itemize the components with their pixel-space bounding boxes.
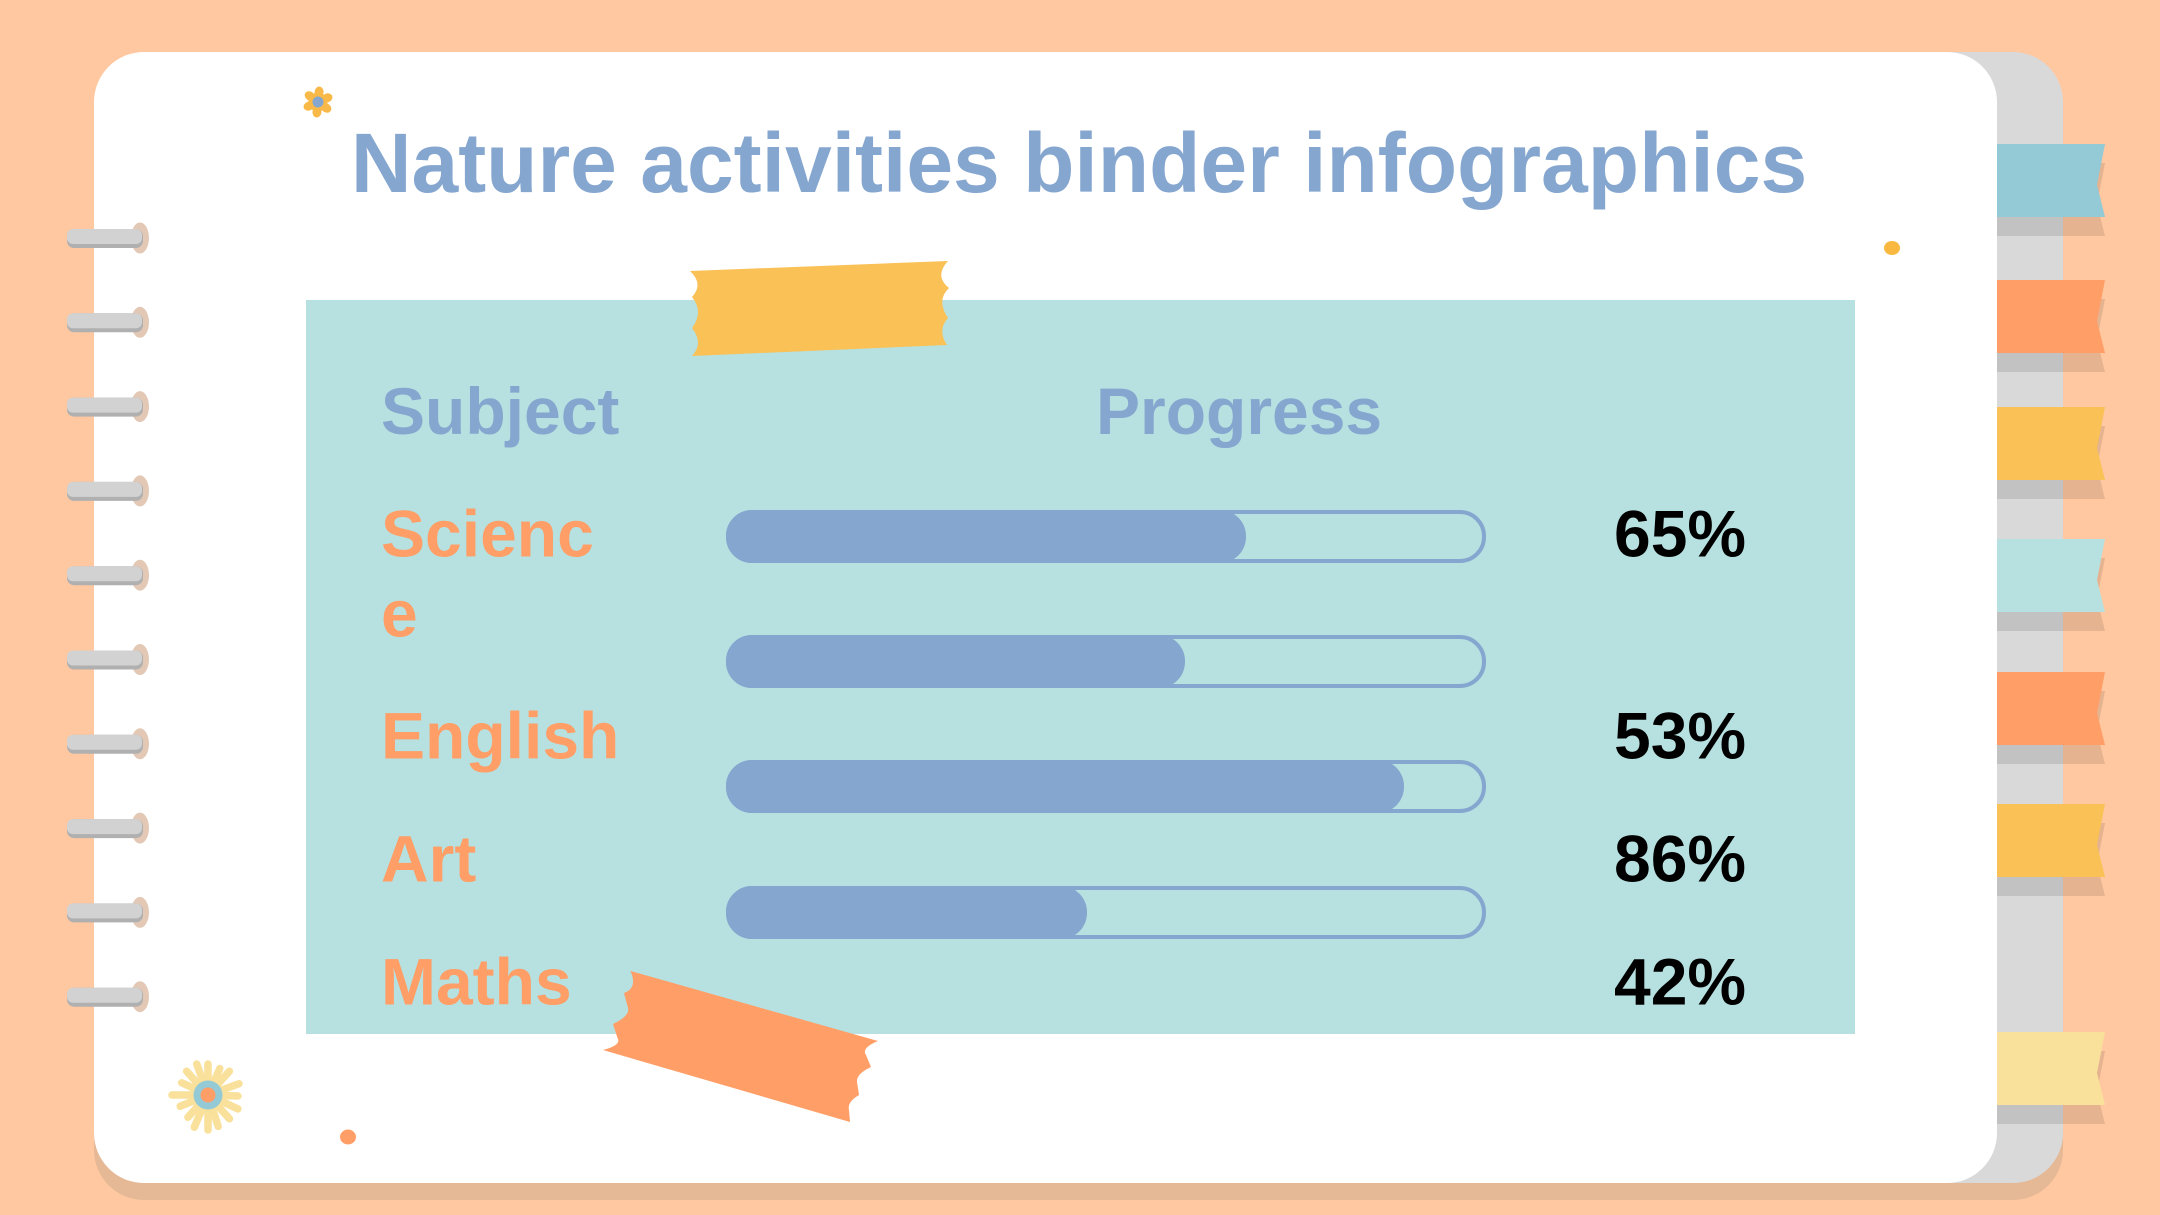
binder rings <box>67 222 149 1012</box>
washi tape: orange <box>603 971 878 1122</box>
tab: teal <box>1997 539 2105 631</box>
value: 86%: 86% <box>1614 822 1746 896</box>
progress bar: second row <box>726 635 1484 688</box>
icon: yellow dot <box>1884 241 1900 255</box>
label: maths: Maths <box>381 944 572 1018</box>
tab: yellow 1 <box>1997 407 2105 499</box>
tab: orange 1 <box>1997 280 2105 372</box>
progress bar: science <box>726 510 1484 563</box>
label: science: e <box>381 576 418 650</box>
tab: pale yellow <box>1997 1032 2105 1124</box>
progress bar: third row <box>726 760 1484 813</box>
label: science: Scienc <box>381 496 594 570</box>
washi tape: yellow <box>690 261 949 356</box>
value: 53%: 53% <box>1614 698 1746 772</box>
value: 65%: 65% <box>1614 496 1746 570</box>
heading: progress: Progress <box>1096 374 1382 448</box>
progress bar: fourth row <box>726 886 1484 939</box>
tab: orange 2 <box>1997 672 2105 764</box>
value: 42%: 42% <box>1614 944 1746 1018</box>
label: art: Art <box>381 822 476 896</box>
heading: subject: Subject <box>381 374 619 448</box>
panel: progress table <box>306 300 1855 1034</box>
icon: sun flower <box>172 1064 239 1130</box>
icon: small flower <box>301 85 335 119</box>
index tabs <box>1997 144 2105 1124</box>
tab: yellow 2 <box>1997 804 2105 896</box>
icon: orange dot <box>340 1130 356 1144</box>
title: Nature activities binder infographics <box>351 116 1807 210</box>
binder back page <box>1900 52 2063 1183</box>
tab: blue <box>1997 144 2105 236</box>
label: english: English <box>381 698 619 772</box>
